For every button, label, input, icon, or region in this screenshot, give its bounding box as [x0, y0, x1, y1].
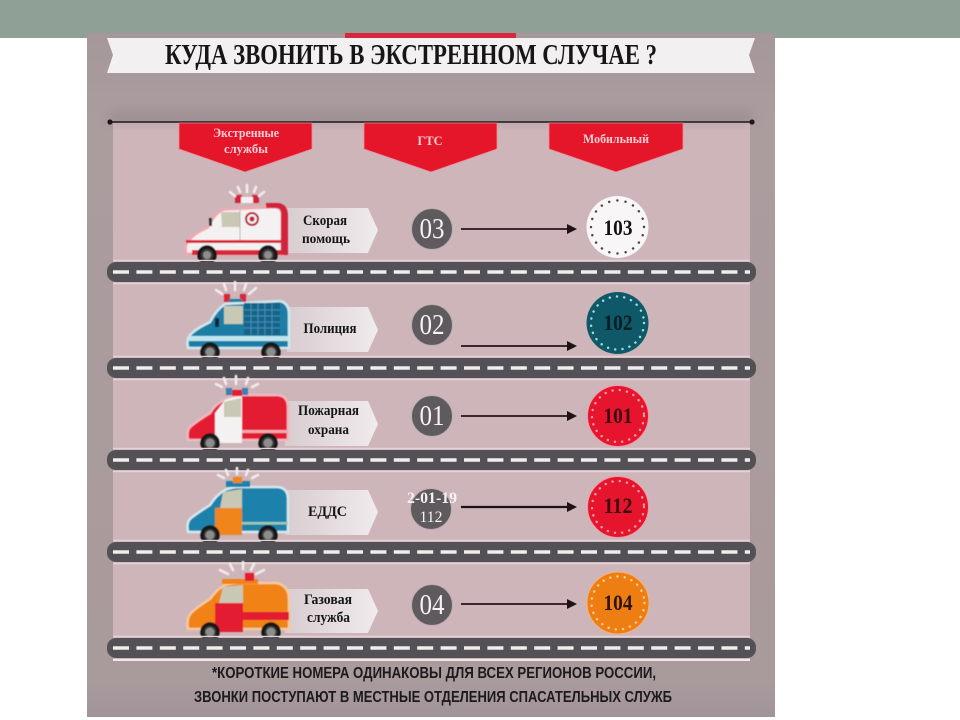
arrow [461, 224, 577, 234]
column banner: landline [364, 123, 497, 172]
label tag: ambulance: помощь [302, 231, 350, 246]
top header bar [0, 0, 960, 38]
label tag: police [287, 307, 378, 352]
row: fire service [187, 376, 648, 451]
landline number 02 [412, 304, 452, 346]
landline number 2-01-19 / 112: 112 [420, 509, 442, 526]
column banner: mobile [549, 123, 683, 172]
landline number 02: 02 [420, 310, 444, 341]
label tag: EDDS [285, 490, 378, 535]
row: police [187, 282, 648, 360]
landline number 04: 04 [420, 590, 444, 621]
column banner: emergency services [179, 123, 312, 172]
infographic background panel [87, 33, 775, 717]
mobile number 101: 101 [604, 403, 632, 428]
road 1 [107, 260, 756, 284]
mobile number 104: 104 [604, 590, 632, 615]
label tag: fire: Пожарная [298, 403, 359, 419]
arrow [461, 599, 577, 609]
road 4 [107, 540, 756, 564]
title: КУДА ЗВОНИТЬ В ЭКСТРЕННОМ СЛУЧАЕ ? [165, 40, 657, 71]
landline number 2-01-19 / 112: 2-01-19 [407, 490, 457, 507]
landline number 01 [412, 396, 452, 436]
column banner: emergency services: Экстренные [213, 126, 279, 140]
mobile number 103: 103 [604, 215, 632, 240]
mobile number 101 [588, 386, 648, 446]
road 2 [107, 356, 756, 380]
landline number 03 [412, 208, 452, 250]
icon: dispatch van [187, 468, 288, 543]
landline number 2-01-19 / 112 [407, 488, 457, 530]
icon: gas van [187, 562, 289, 640]
label tag: EDDS: ЕДДС [308, 504, 347, 520]
row: gas service [187, 562, 649, 640]
column banner: mobile: Мобильный [583, 132, 649, 146]
mobile number 102: 102 [604, 310, 632, 335]
mobile number 112: 112 [604, 493, 632, 518]
landline number 03: 03 [420, 214, 444, 245]
mobile number 102 [586, 292, 648, 354]
icon: police van [187, 282, 289, 360]
mobile number 112 [588, 476, 648, 538]
footnote [194, 665, 672, 706]
column banner: emergency services: службы [224, 142, 268, 156]
label tag: police: Полиция [304, 321, 356, 337]
inner lilac panel [113, 122, 750, 660]
label tag: gas: Газовая [304, 592, 352, 608]
arrow [461, 502, 577, 512]
arrow [461, 411, 577, 421]
label tag: fire [285, 401, 378, 446]
label tag: ambulance: Скорая [303, 213, 347, 229]
road 5 [107, 636, 756, 660]
footnote: *КОРОТКИЕ НОМЕРА ОДИНАКОВЫ ДЛЯ ВСЕХ РЕГИОНОВ РОССИИ, [212, 665, 656, 682]
footnote: ЗВОНКИ ПОСТУПАЮТ В МЕСТНЫЕ ОТДЕЛЕНИЯ СПАСАТЕЛЬНЫХ СЛУЖБ [194, 689, 672, 706]
mobile number 104 [587, 572, 649, 634]
label tag: ambulance [285, 208, 378, 253]
label tag: gas: служба [307, 610, 350, 626]
column banner: landline: ГТС [418, 134, 442, 148]
label tag: fire: охрана [308, 423, 349, 438]
row: unified dispatch [187, 468, 648, 543]
label tag: gas [285, 589, 378, 633]
mobile number 103 [586, 196, 648, 258]
arrow [461, 341, 577, 351]
icon: ambulance van [185, 185, 288, 263]
road 3 [107, 448, 756, 472]
banner rail [107, 112, 755, 125]
landline number 01: 01 [420, 401, 444, 432]
landline number 04 [412, 584, 452, 626]
icon: fire truck [187, 376, 288, 451]
row: ambulance [185, 185, 648, 263]
title ribbon [107, 38, 755, 73]
